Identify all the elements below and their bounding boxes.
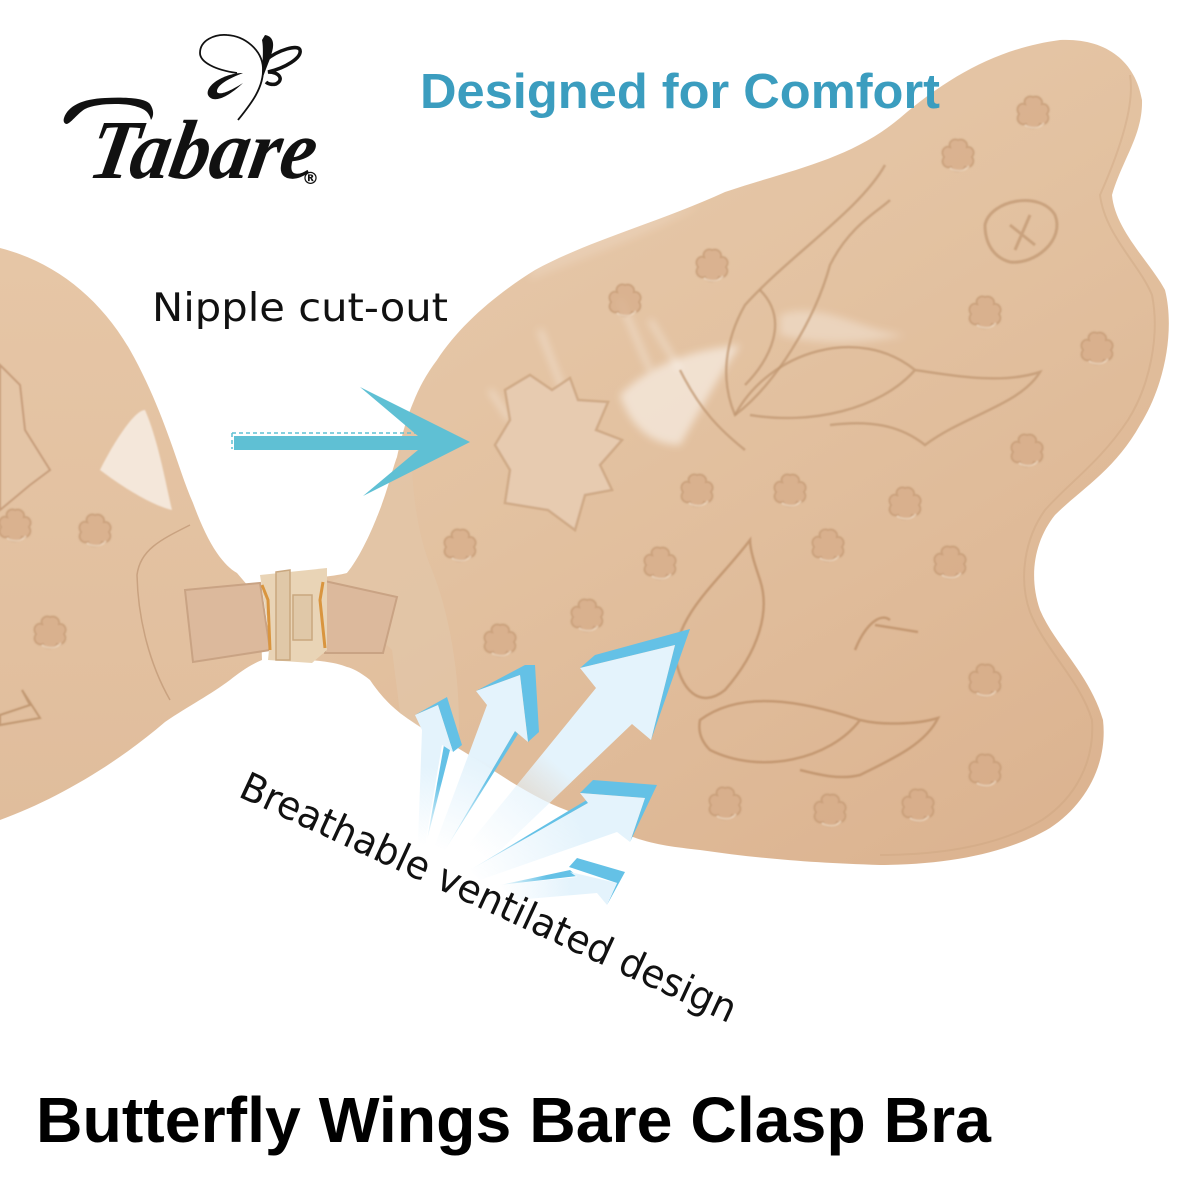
elastic strap panel — [325, 403, 459, 748]
gloss highlights — [490, 205, 905, 445]
embossed butterfly lower — [675, 540, 938, 777]
arrow: nipple cut-out — [232, 387, 470, 496]
registered mark: ® — [302, 169, 319, 189]
left wing flower emboss — [0, 365, 50, 510]
embossed flowers — [0, 96, 1113, 826]
bra product illustration — [0, 40, 1169, 865]
heading: Designed for Comfort: Designed for Comfort — [420, 65, 940, 119]
arrow 3 — [468, 629, 690, 860]
round emblem emboss — [985, 201, 1057, 262]
arrow 5 — [500, 858, 625, 905]
arrow 2 — [435, 665, 539, 850]
label: Nipple cut-out: Nipple cut-out — [152, 286, 448, 331]
clasp right strap — [320, 580, 397, 653]
title: Butterfly Wings Bare Clasp Bra: Butterfly Wings Bare Clasp Bra — [36, 1084, 991, 1156]
left wing gloss — [100, 410, 172, 510]
arrow 4 — [470, 780, 657, 880]
clasp hinge — [260, 568, 327, 663]
clasp left strap — [185, 583, 270, 662]
logo butterfly — [200, 35, 300, 120]
right wing inner edge — [880, 75, 1155, 855]
right wing — [285, 40, 1169, 865]
logo: Tabare — [64, 35, 325, 197]
arrow 1 — [415, 697, 462, 845]
left wing — [0, 248, 262, 820]
logo wordmark: Tabare — [83, 105, 325, 197]
label: Breathable ventilated design: Breathable ventilated design — [233, 764, 744, 1032]
nipple cut-out flower — [495, 375, 622, 530]
left wing leaf emboss — [0, 690, 40, 725]
logo swoosh crossbar — [64, 98, 153, 124]
left wing inner seam — [137, 525, 190, 700]
arrows: breathable ventilation — [415, 629, 690, 905]
embossed butterfly upper — [680, 165, 1040, 450]
